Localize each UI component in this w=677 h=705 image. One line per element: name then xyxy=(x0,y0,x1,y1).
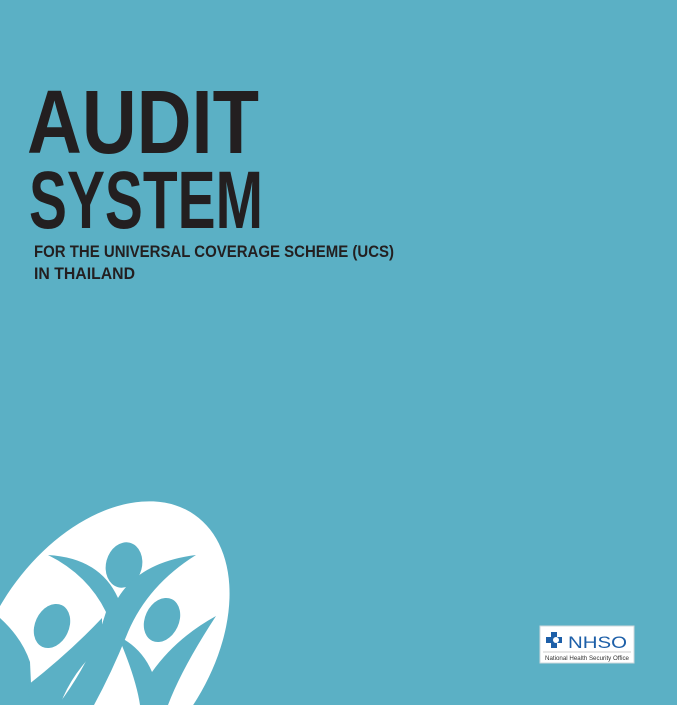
logo: NHSO xyxy=(540,626,634,663)
title: AUDIT xyxy=(27,73,259,173)
title: SYSTEM xyxy=(29,155,263,246)
icon: people in white oval xyxy=(0,501,230,705)
subtitle xyxy=(34,242,394,283)
subtitle: IN THAILAND xyxy=(34,264,135,283)
logo: NHSO: National Health Security Office xyxy=(545,656,630,662)
subtitle: FOR THE UNIVERSAL COVERAGE SCHEME (UCS) xyxy=(34,242,394,261)
logo: NHSO: NHSO xyxy=(568,633,627,652)
title xyxy=(27,73,263,246)
